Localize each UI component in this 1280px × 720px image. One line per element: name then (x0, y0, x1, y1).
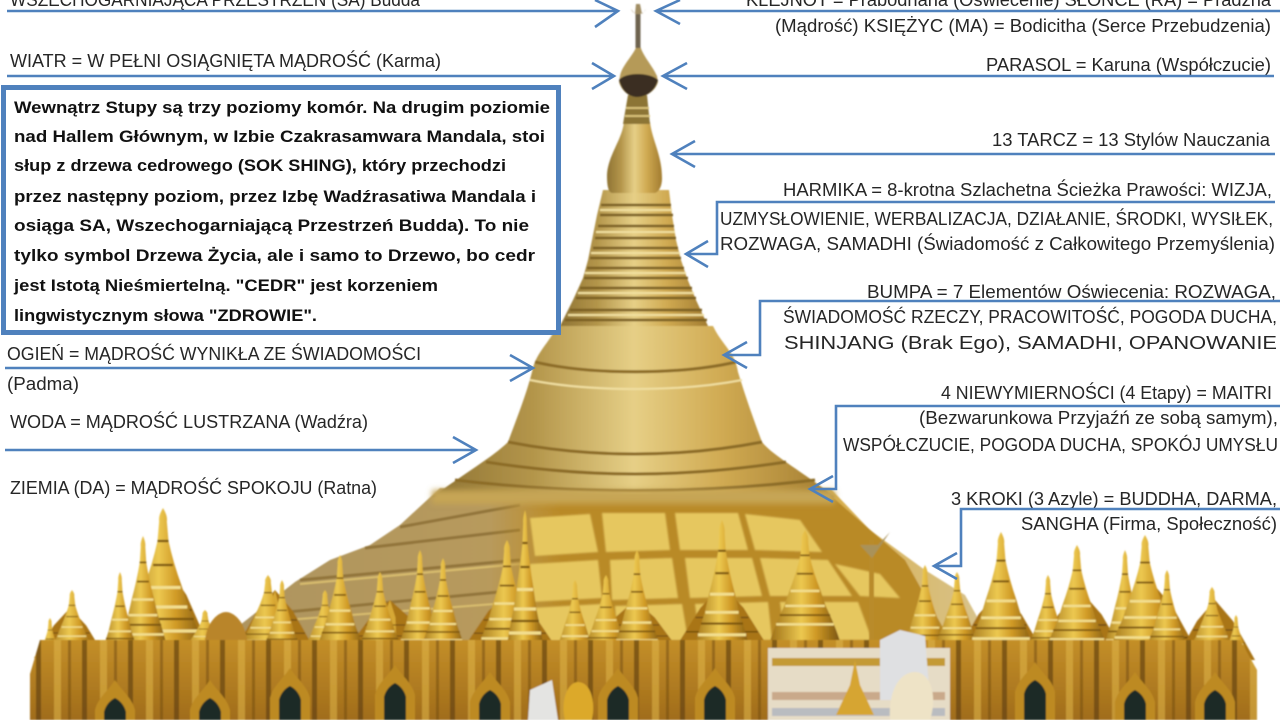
panel: text about the stupa chambers: jest Istotą Nieśmiertelną. "CEDR" jest korzeniem (13, 276, 438, 295)
label: three steps: 3 KROKI (3 Azyle) = BUDDHA, DARMA, (951, 489, 1277, 509)
hanging lantern (205, 612, 247, 645)
panel: text about the stupa chambers (4, 88, 558, 332)
panel: text about the stupa chambers: słup z drzewa cedrowego (SOK SHING), który przechodzi (14, 156, 506, 175)
white central building (768, 648, 950, 720)
front gilded spire by the building (836, 660, 874, 715)
label: earth: ZIEMIA (DA) = MĄDROŚĆ SPOKOJU (Ratna) (10, 477, 377, 498)
gold terrace shadow (490, 495, 950, 640)
thirteen disks tower (560, 190, 708, 326)
label: bumpa: BUMPA = 7 Elementów Oświecenia: ROZWAGA, (867, 282, 1276, 302)
shrine row at the foot (30, 640, 1257, 720)
label: parasol (663, 55, 1274, 89)
label: bumpa (724, 282, 1280, 368)
lower terrace base of the stupa (235, 488, 990, 650)
parasol (619, 45, 658, 97)
label: harmika (686, 179, 1275, 267)
dark arched niches (95, 662, 1235, 720)
panel: text about the stupa chambers: lingwistycznym słowa "ZDROWIE". (14, 306, 317, 325)
label: parasol: PARASOL = Karuna (Współczucie) (986, 55, 1271, 75)
label: harmika: ROZWAGA, SAMADHI (Świadomość z Całkowitego Przemyślenia) (720, 233, 1275, 254)
white tower on the right of the building (880, 630, 930, 700)
label: water: WODA = MĄDROŚĆ LUSTRZANA (Wadźra) (10, 411, 368, 432)
label: fire (5, 343, 533, 394)
panel: text about the stupa chambers: tylko symbol Drzewa Życia, ale i samo to Drzewo, bo cedr (14, 246, 535, 265)
small gilded spires (44, 508, 1244, 647)
label: four immeasurables (810, 382, 1280, 502)
label: fire: OGIEŃ = MĄDROŚĆ WYNIKŁA ZE ŚWIADOMOŚCI (7, 343, 421, 364)
label: four immeasurables: (Bezwarunkowa Przyjaźń ze sobą samym), (919, 408, 1278, 428)
label: water (5, 411, 476, 463)
lotus bud (607, 122, 662, 193)
guardian lion statue (563, 682, 593, 720)
label: three steps: SANGHA (Firma, Społeczność) (1021, 514, 1277, 534)
label: thirteen disks (672, 130, 1275, 167)
shrine roofs behind the spires (33, 588, 1256, 662)
label: space (7, 0, 618, 27)
bell-shaped dome (432, 326, 835, 497)
label: bumpa: ŚWIADOMOŚĆ RZECZY, PRACOWITOŚĆ, POGODA DUCHA, (783, 306, 1277, 327)
finial with crescent (631, 4, 646, 48)
label: jewel, sun and moon (656, 0, 1280, 36)
gold terrace blocks (530, 513, 900, 644)
panel: text about the stupa chambers: Wewnątrz Stupy są trzy poziomy komór. Na drugim poziomie (14, 98, 550, 117)
label: thirteen disks: 13 TARCZ = 13 Stylów Nauczania (992, 130, 1271, 150)
collar below the parasol (623, 95, 650, 124)
panel: text about the stupa chambers: osiąga SA, Wszechogarniającą Przestrzeń Budda). To nie (14, 216, 529, 235)
label: harmika: HARMIKA = 8-krotna Szlachetna Ścieżka Prawości: WIZJA, (783, 179, 1272, 200)
label: wind (7, 50, 614, 89)
label: fire: (Padma) (7, 374, 79, 394)
panel: text about the stupa chambers: nad Hallem Głównym, w Izbie Czakrasamwara Mandala, stoi (14, 127, 545, 146)
label: four immeasurables: 4 NIEWYMIERNOŚCI (4 Etapy) = MAITRI (941, 382, 1272, 403)
white statue (890, 672, 933, 720)
label: wind: WIATR = W PEŁNI OSIĄGNIĘTA MĄDROŚĆ (Karma) (10, 50, 441, 71)
label: harmika: UZMYSŁOWIENIE, WERBALIZACJA, DZIAŁANIE, ŚRODKI, WYSIŁEK, (720, 208, 1273, 229)
label: jewel, sun and moon: (Mądrość) KSIĘŻYC (MA) = Bodicitha (Serce Przebudzenia) (775, 16, 1271, 36)
white offering shrine (528, 680, 558, 720)
panel: text about the stupa chambers: przez następny poziom, przez Izbę Wadźrasatiwa Mandala i (14, 187, 536, 206)
label: three steps (934, 489, 1280, 579)
soft transition between dome and terraces (432, 490, 835, 504)
lamp pole (860, 532, 890, 640)
label: bumpa: SHINJANG (Brak Ego), SAMADHI, OPANOWANIE (784, 333, 1277, 353)
